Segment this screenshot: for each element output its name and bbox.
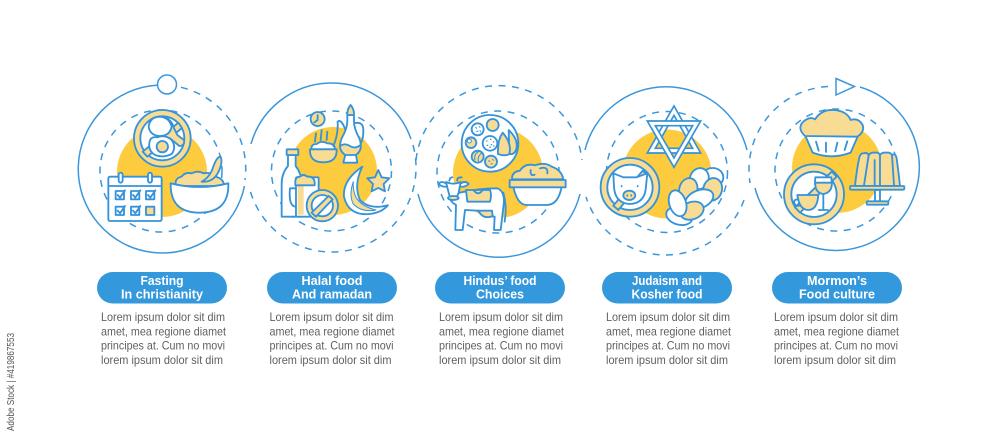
- text block 2: Lorem ipsum dolor sit dim: [270, 310, 394, 324]
- yellow disc 4: [622, 130, 712, 218]
- label pill 1: In christianity: [121, 288, 203, 302]
- icon: jelly on a stand: [850, 153, 904, 205]
- panel: judaism and kosher food: [585, 87, 747, 255]
- outer ring 2: [250, 83, 416, 252]
- icon: forbidden plate of meat and egg: [134, 110, 191, 167]
- label pill 4: Judaism and: [632, 274, 702, 288]
- label pill 2: Halal food: [302, 274, 362, 288]
- text block 1: principes at. Cum no movi: [101, 339, 225, 353]
- icon: cow: [439, 177, 506, 230]
- icon: forbidden wine and coffee: [784, 164, 844, 224]
- panel: hindus food choices: [416, 86, 582, 257]
- label pill 5: [772, 272, 902, 304]
- inner dashed ring 2: [272, 111, 392, 231]
- label pill 3: Hindus’ food: [464, 274, 536, 288]
- icon: bowl of curry: [510, 164, 566, 205]
- icon: challah bread: [664, 165, 725, 228]
- label pill 2: [267, 272, 397, 304]
- icon: forbidden pig: [601, 158, 659, 217]
- icon: crossed-out bottle and beer: [282, 149, 338, 221]
- play marker triangle: [836, 78, 854, 95]
- text block 5: amet, mea regione diamet: [774, 324, 900, 338]
- panel: mormons food culture: [749, 78, 919, 250]
- text block 2: [270, 310, 395, 367]
- icon: ornate jug: [333, 105, 363, 163]
- inner dashed ring 4: [606, 112, 728, 232]
- icon: star: [367, 170, 389, 191]
- text block 4: amet, mea regione diamet: [606, 324, 732, 338]
- icon: star of david: [651, 111, 697, 163]
- text block 3: lorem ipsum dolor sit dim: [439, 353, 561, 367]
- text block 2: amet, mea regione diamet: [270, 324, 395, 338]
- label pill 4: Kosher food: [632, 288, 702, 302]
- start marker circle: [158, 75, 176, 94]
- text block 3: amet, mea regione diamet: [439, 324, 565, 338]
- outer ring 1: [78, 85, 246, 253]
- text block 2: principes at. Cum no movi: [270, 339, 394, 353]
- label pill 5: Mormon’s: [807, 274, 867, 288]
- text block 1: amet, mea regione diamet: [101, 324, 227, 338]
- text block 1: lorem ipsum dolor sit dim: [101, 353, 223, 367]
- text block 5: Lorem ipsum dolor sit dim: [774, 310, 898, 324]
- text block 5: lorem ipsum dolor sit dim: [774, 353, 896, 367]
- outer ring 3: [416, 86, 582, 257]
- text block 1: [101, 310, 227, 367]
- inner dashed ring 3: [437, 111, 559, 233]
- text block 4: [606, 310, 732, 367]
- text block 2: lorem ipsum dolor sit dim: [270, 353, 392, 367]
- label pill 2: And ramadan: [292, 288, 372, 302]
- icon: muffin: [800, 110, 863, 156]
- icon: bowl of porridge with spoon: [171, 157, 228, 213]
- yellow disc 3: [453, 128, 543, 218]
- yellow disc 2: [289, 127, 377, 215]
- text block 5: [774, 310, 900, 367]
- label pill 3: Choices: [476, 288, 524, 302]
- outer ring 5: [749, 86, 919, 250]
- text block 1: Lorem ipsum dolor sit dim: [101, 310, 225, 324]
- icon: bowl with steam: [310, 130, 337, 162]
- panel: fasting in christianity: [78, 75, 246, 253]
- label pill 5: Food culture: [799, 288, 875, 302]
- text block 3: [439, 310, 565, 367]
- label pill 1: [97, 272, 227, 304]
- panel: halal food and ramadan: [250, 83, 416, 252]
- text block 3: principes at. Cum no movi: [439, 339, 563, 353]
- yellow disc 5: [792, 123, 882, 213]
- label pill 4: [602, 272, 732, 304]
- icon: thali plate: [462, 115, 518, 172]
- icon: clock: [311, 112, 325, 126]
- inner dashed ring 5: [775, 109, 897, 231]
- text block 5: principes at. Cum no movi: [774, 339, 898, 353]
- yellow disc 1: [117, 127, 207, 217]
- text block 4: principes at. Cum no movi: [606, 339, 730, 353]
- icon: calendar with checkmarks: [108, 173, 162, 221]
- label pill 3: [435, 272, 565, 304]
- text block 3: Lorem ipsum dolor sit dim: [439, 310, 563, 324]
- stock id caption: Adobe Stock | #419867553: [6, 333, 17, 431]
- text block 4: Lorem ipsum dolor sit dim: [606, 310, 730, 324]
- text block 4: lorem ipsum dolor sit dim: [606, 353, 728, 367]
- inner dashed ring 1: [100, 110, 222, 232]
- label pill 1: Fasting: [140, 274, 184, 288]
- outer ring 4: [585, 87, 747, 255]
- icon: crescent moon: [344, 167, 388, 214]
